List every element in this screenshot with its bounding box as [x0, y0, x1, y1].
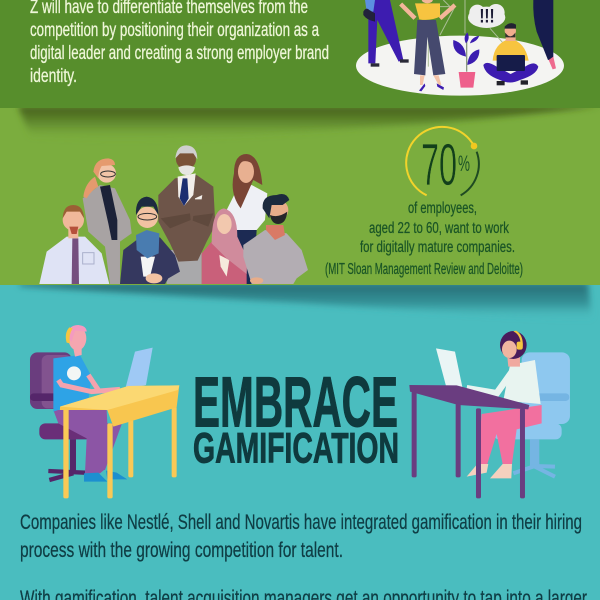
- panel: dark green top band: [0, 0, 600, 108]
- ring dot: [471, 143, 477, 149]
- illustration: gamer at yellow desk: [30, 325, 179, 498]
- illustration: woman at purple desk: [409, 331, 570, 498]
- panel: mid band bottom edge: [0, 265, 600, 285]
- yellow desk: [60, 385, 179, 498]
- shadow under mid band: [20, 283, 592, 320]
- person: standing left: [363, 0, 409, 67]
- person: man with blue scarf and navy jacket: [120, 197, 180, 284]
- stat percent sign: %: [458, 151, 470, 176]
- white floor ellipse: [356, 36, 564, 96]
- keyboard and mouse: [91, 390, 145, 399]
- stat number 70: 70: [421, 132, 457, 198]
- monitor: [436, 348, 463, 392]
- icon: speech bubble with exclamation marks: [468, 4, 505, 28]
- keyboard: [442, 392, 497, 399]
- stat: 70 percent ring: [406, 127, 479, 195]
- title: Embrace Gamification: [193, 364, 399, 472]
- illustration: team with laptop on white ellipse: [356, 0, 564, 96]
- text block: employer brand paragraph: [30, 0, 329, 87]
- person: standing right: [533, 0, 556, 69]
- person: woman with long brown hair: [227, 154, 267, 284]
- text block: employer brand paragraph: digital leader and creating a strong employer brand: [30, 42, 329, 64]
- purple desk: [409, 385, 529, 498]
- text block: stat description: aged 22 to 60, want to work: [369, 220, 509, 237]
- text block: gamification paragraph one: process with the growing competition for talent.: [20, 539, 343, 562]
- person: woman centre: [401, 0, 455, 91]
- monitor: [125, 348, 153, 390]
- title: Embrace Gamification: EMBRACE: [193, 364, 398, 442]
- person: man in grey sweater with beard: [243, 194, 308, 284]
- panel: mid green background: [0, 105, 600, 287]
- text block: stat description: of employees,: [408, 200, 477, 217]
- text block: stat description: [325, 200, 523, 278]
- text block: stat description: for digitally mature companies.: [360, 239, 515, 256]
- icon: speech bubble with exclamation marks: !!!: [479, 7, 495, 28]
- ring arc dark: [461, 152, 479, 195]
- text block: employer brand paragraph: identity.: [30, 65, 77, 87]
- illustration: group of seven employees: [39, 145, 308, 284]
- text block: gamification paragraph one: [20, 511, 582, 562]
- office chair purple: [30, 352, 108, 480]
- person: man in blue shirt with tie: [39, 205, 109, 284]
- panel: teal background: [0, 284, 600, 600]
- person: seated man with laptop: [483, 23, 538, 85]
- ring arc yellow: [406, 127, 474, 195]
- person: older man in brown suit: [158, 145, 215, 284]
- title: Embrace Gamification: GAMIFICATION: [193, 424, 399, 472]
- person: woman in pink hijab: [202, 208, 247, 284]
- person: gamer: [53, 325, 127, 482]
- icon: potted plant: [453, 32, 479, 88]
- shadow under top band: [18, 106, 600, 141]
- person: woman with headphones: [467, 331, 542, 478]
- person: woman with red ponytail: [83, 158, 132, 284]
- text block: employer brand paragraph: competition by positioning their organization as a: [30, 19, 319, 41]
- office chair light blue: [493, 352, 570, 477]
- background plant lines: [428, 0, 503, 67]
